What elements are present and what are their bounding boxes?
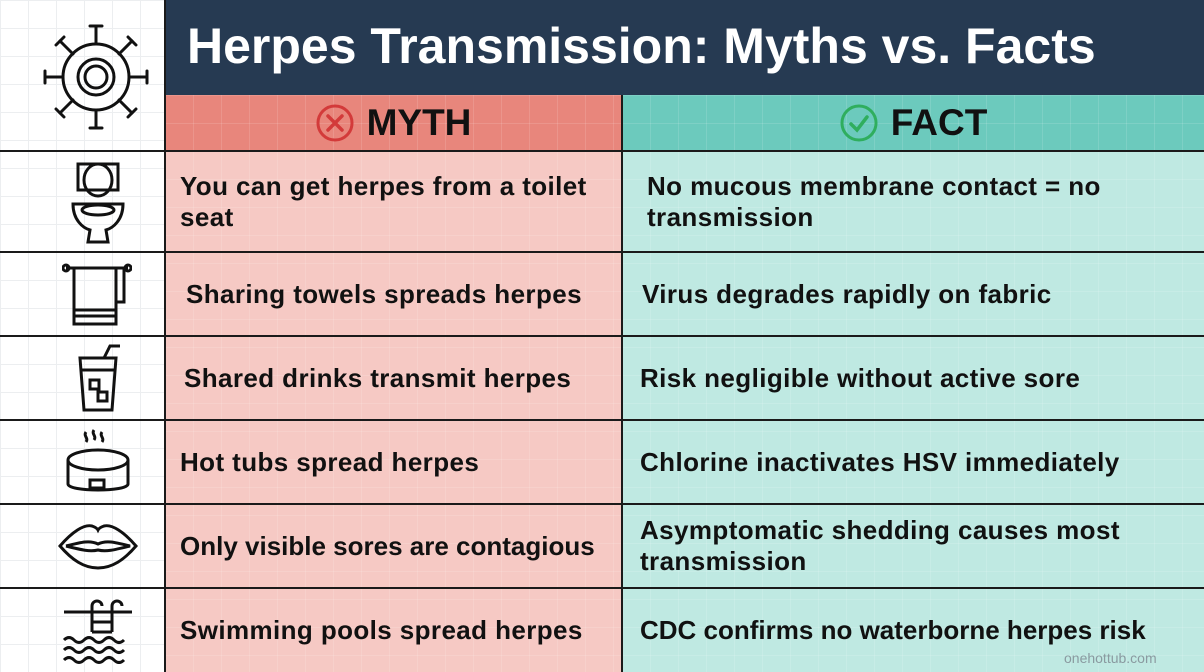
fact column [622, 95, 1204, 672]
watermark: onehottub.com [1064, 650, 1157, 666]
fact header: FACT [891, 102, 987, 142]
myth column [165, 95, 621, 672]
myth text: pools: Swimming pools spread herpes [180, 615, 583, 645]
myth text: drinks: Shared drinks transmit herpes [184, 362, 571, 392]
icon: drink [78, 344, 120, 412]
fact text: hot tubs: Chlorine inactivates HSV immediately [640, 446, 1120, 476]
fact text: drinks: Risk negligible without active sore [640, 362, 1080, 392]
fact text: sores: Asymptomatic shedding causes most transmission [640, 515, 1120, 576]
icon: pool [63, 600, 132, 664]
header bar [165, 0, 1204, 95]
myth text: toilet: You can get herpes from a toilet seat [180, 170, 587, 232]
myth text: hot tubs: Hot tubs spread herpes [180, 446, 479, 476]
icon: hot tub [66, 429, 130, 492]
icon: lips [58, 524, 138, 570]
myth text: towels: Sharing towels spreads herpes [186, 278, 582, 308]
fact header [622, 95, 1204, 150]
icon: towel [62, 264, 132, 326]
myth text: sores: Only visible sores are contagious [180, 530, 595, 560]
fact text: pools: CDC confirms no waterborne herpes risk [640, 615, 1146, 645]
myth header [165, 95, 621, 150]
fact text: towels: Virus degrades rapidly on fabric [642, 278, 1052, 308]
fact text: toilet: No mucous membrane contact = no transmission [647, 170, 1101, 232]
icon: toilet [72, 162, 124, 244]
icon: virus [44, 24, 148, 130]
title: Herpes Transmission: Myths vs. Facts [187, 18, 1096, 74]
myth header: MYTH [367, 102, 471, 142]
